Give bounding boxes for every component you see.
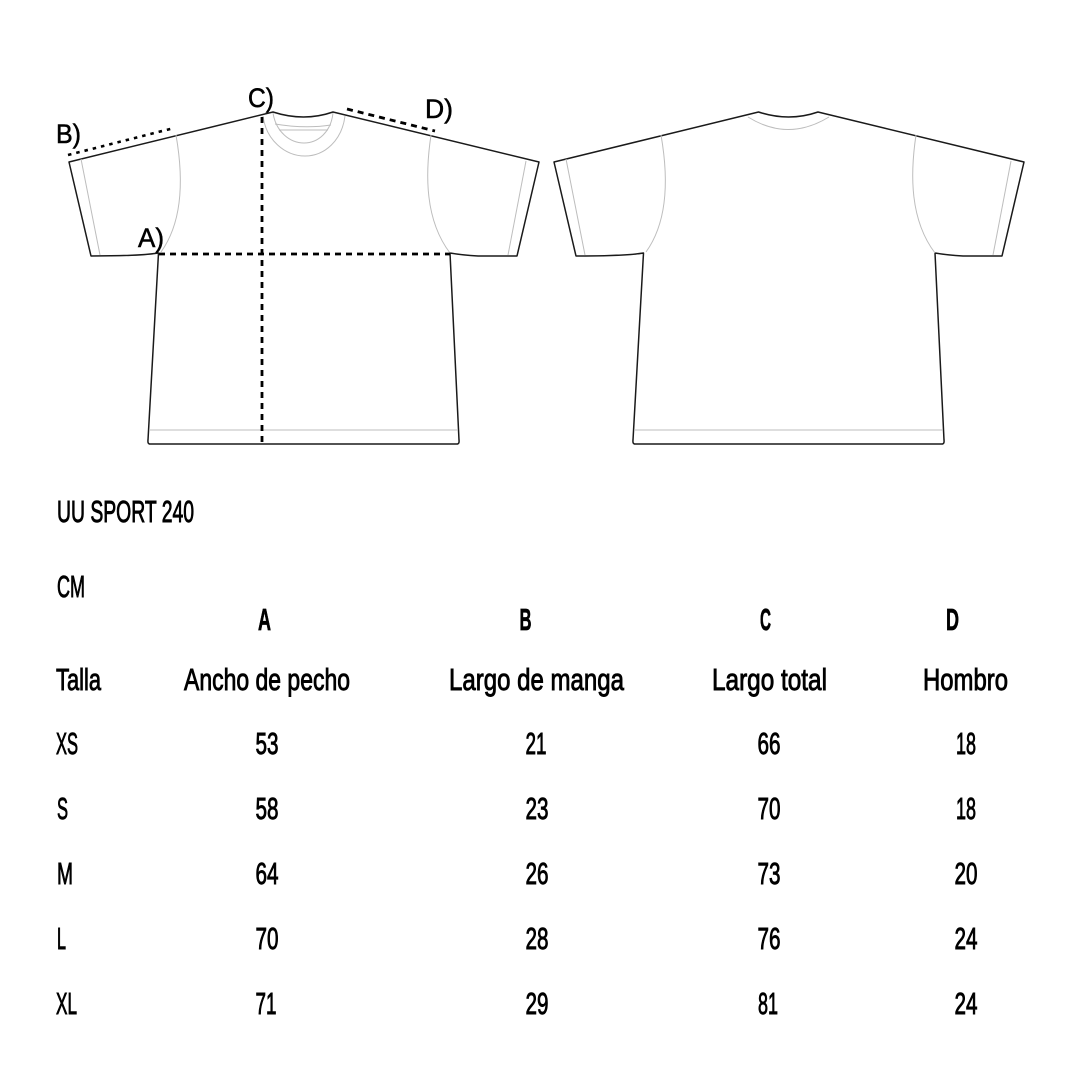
label A): A) (138, 223, 164, 253)
dashed line: sleeve length B (68, 128, 174, 155)
back t-shirt outline (554, 112, 1024, 444)
row XS (56, 727, 976, 761)
row S (57, 792, 976, 826)
column letters: D (946, 603, 959, 637)
label B): B) (56, 119, 81, 149)
row XL: 81 (758, 987, 778, 1021)
back seams and neck (566, 117, 1011, 430)
row M (57, 857, 978, 891)
row XL: 71 (256, 987, 276, 1021)
row S: 70 (758, 792, 780, 826)
row XS: 53 (256, 727, 278, 761)
row L: 70 (256, 922, 278, 956)
size table (56, 603, 1008, 1021)
header row: Ancho de pecho (184, 663, 350, 697)
row XS: 66 (758, 727, 780, 761)
row L: 76 (758, 922, 780, 956)
header row: Largo de manga (449, 663, 624, 697)
dashed line: total length C (261, 117, 263, 444)
row S: 58 (256, 792, 278, 826)
row XS: 21 (526, 727, 546, 761)
row XL: XL (56, 987, 77, 1021)
column letters: B (520, 603, 532, 637)
row M: 64 (256, 857, 279, 891)
dashed line: shoulder D (347, 109, 435, 131)
column letters (258, 603, 959, 637)
row M: 26 (526, 857, 548, 891)
label C): C) (248, 83, 274, 113)
row L: 28 (526, 922, 548, 956)
row L: L (57, 922, 66, 956)
header row: Talla (56, 663, 101, 697)
row S: S (57, 792, 68, 826)
front seams and collar (81, 113, 526, 430)
row XL: 29 (526, 987, 548, 1021)
row M: 73 (758, 857, 780, 891)
label D): D) (425, 94, 453, 124)
product title: UU SPORT 240 (57, 495, 194, 529)
row M: 20 (954, 857, 978, 891)
row S: 18 (956, 792, 976, 826)
row XL: 24 (954, 987, 978, 1021)
header row: Hombro (923, 663, 1008, 697)
row XL (56, 987, 978, 1021)
row M: M (57, 857, 73, 891)
front t-shirt diagram (56, 83, 539, 444)
row XS: XS (56, 727, 78, 761)
header row: Largo total (712, 663, 827, 697)
row L: 24 (954, 922, 978, 956)
back t-shirt diagram (554, 112, 1024, 444)
front t-shirt outline (69, 112, 539, 444)
header row (56, 663, 1008, 697)
dashed line: chest width A (159, 253, 450, 255)
row S: 23 (526, 792, 548, 826)
unit label: CM (57, 570, 85, 604)
column letters: A (258, 603, 271, 637)
row L (57, 922, 978, 956)
column letters: C (760, 603, 771, 637)
row XS: 18 (956, 727, 976, 761)
